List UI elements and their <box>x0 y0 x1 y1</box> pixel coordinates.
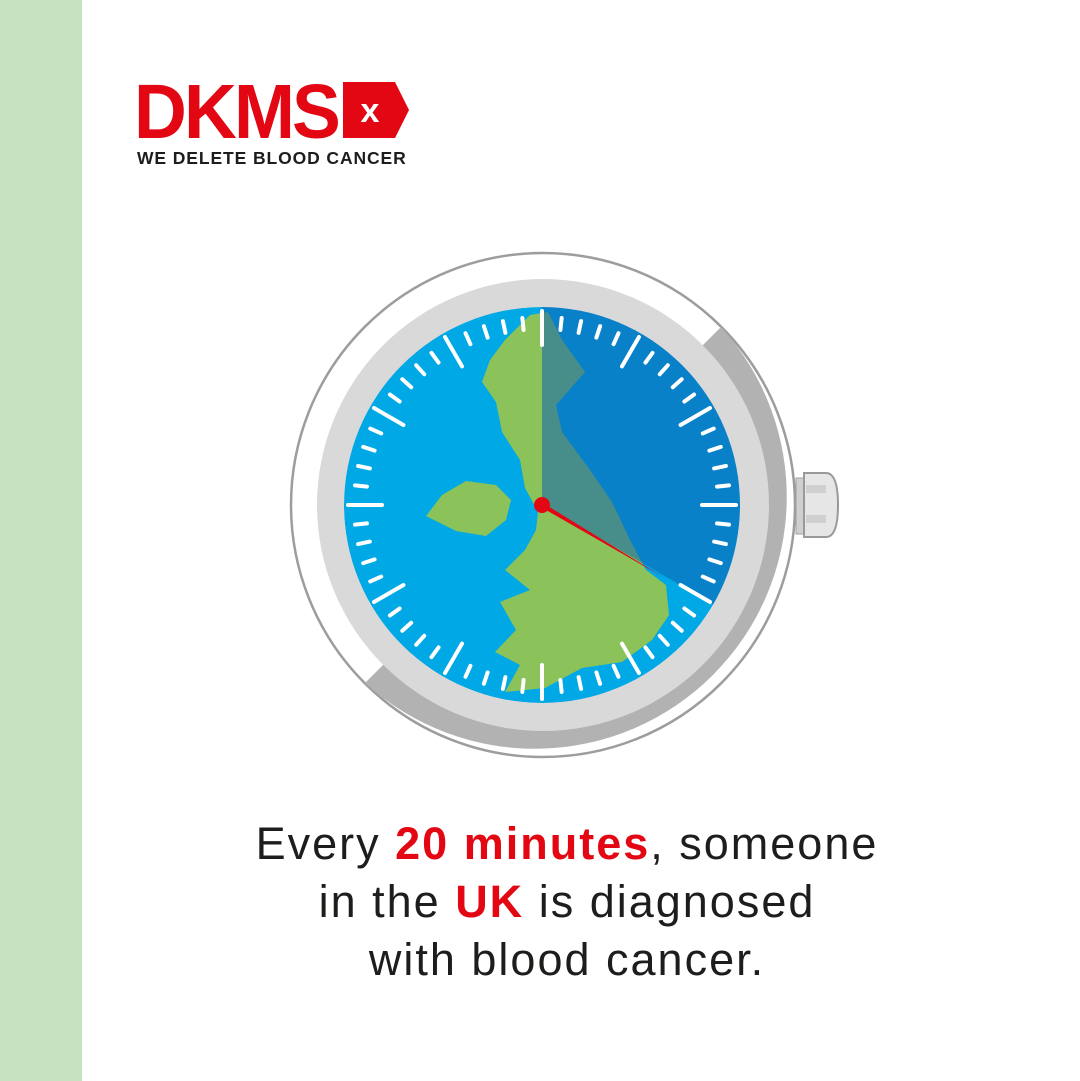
icon: logo tag <box>343 82 409 138</box>
ticks <box>348 311 736 699</box>
caption text: with blood cancer. <box>369 934 765 985</box>
caption text: Every 20 minutes, someone <box>256 818 878 869</box>
tagline: WE DELETE BLOOD CANCER <box>137 148 407 168</box>
logo: DKMS <box>134 69 409 168</box>
minute hand <box>534 497 663 577</box>
crown <box>796 473 838 537</box>
caption text <box>256 818 878 985</box>
logo: DKMS: DKMS <box>134 69 338 155</box>
icon: logo tag: x <box>361 92 380 130</box>
caption text: in the UK is diagnosed <box>319 876 815 927</box>
clock illustration <box>290 252 839 758</box>
clock face with UK map <box>344 300 748 703</box>
